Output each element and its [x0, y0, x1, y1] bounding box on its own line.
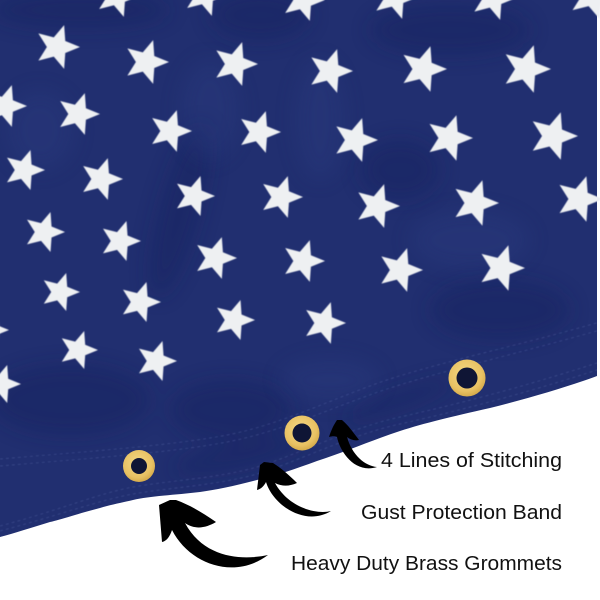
arrow: brass grommets [159, 500, 268, 567]
stitching lines [0, 322, 600, 531]
grommet: middle [284, 416, 320, 450]
label: heavy duty brass grommets: Heavy Duty Brass Grommets [291, 553, 562, 575]
arrow: gust band [257, 462, 331, 516]
label: 4 lines of stitching: 4 Lines of Stitching [381, 450, 562, 472]
grommet: left [123, 450, 155, 482]
arrow: stitching [329, 420, 377, 468]
grommet: right [448, 360, 486, 396]
label: gust protection band: Gust Protection Band [361, 502, 562, 524]
stars [0, 0, 600, 403]
